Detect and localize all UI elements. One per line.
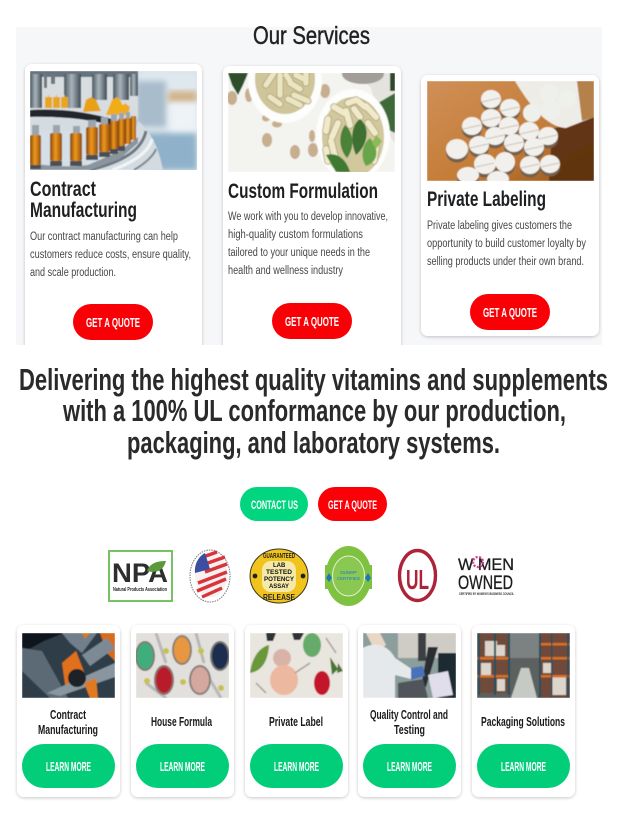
- label: Packaging Solutions: [481, 714, 565, 729]
- headline: packaging, and laboratory systems.: [127, 425, 500, 460]
- logo: guaranteed lab tested: LAB: [273, 563, 286, 569]
- logo: natural products association: NPA: [112, 558, 168, 588]
- logo: ul: [400, 550, 436, 600]
- logo: gmp certified: GMP: [340, 570, 357, 575]
- card: packaging solutions: [472, 625, 575, 797]
- card description: selling products under their own brand.: [427, 256, 584, 268]
- image: colourful supplements: [136, 633, 229, 698]
- card: quality control and testing: [358, 625, 461, 797]
- logo: ul: UL: [406, 564, 429, 595]
- label: Contract: [50, 707, 86, 722]
- image: machinery: [22, 633, 115, 698]
- label: [38, 707, 98, 737]
- card description: [228, 211, 388, 277]
- button: contact us: CONTACT US: [251, 500, 298, 512]
- button: get a quote: [73, 304, 153, 340]
- logo: guaranteed lab tested: POTENCY: [264, 576, 295, 583]
- button: learn more: LEARN MORE: [501, 759, 546, 774]
- button: learn more: LEARN MORE: [160, 759, 205, 774]
- label: Manufacturing: [38, 722, 98, 737]
- label: House Formula: [151, 714, 212, 729]
- button: get a quote: GET A QUOTE: [328, 500, 377, 512]
- logo: guaranteed lab tested: ASSAY: [269, 583, 290, 590]
- card description: opportunity to build customer loyalty by: [427, 238, 586, 250]
- image: white tablets: [427, 81, 594, 181]
- panel: our services: [16, 22, 602, 357]
- image: lab technician: [363, 633, 456, 698]
- button: learn more: LEARN MORE: [46, 759, 91, 774]
- button: learn more: [22, 744, 115, 788]
- image: bottling line: [30, 71, 197, 170]
- card: private labeling: [421, 75, 599, 336]
- headline: [19, 362, 608, 460]
- logo: gmp certified: CERTIFIED: [337, 576, 361, 581]
- image: warehouse: [477, 633, 570, 698]
- logo: guaranteed lab tested: [250, 549, 308, 603]
- label: Quality Control and: [370, 707, 448, 722]
- card description: Private labeling gives customers the: [427, 220, 572, 232]
- button: get a quote: GET A QUOTE: [483, 306, 537, 320]
- logo: women owned: W MEN: [458, 555, 514, 574]
- logo: guaranteed lab tested: RELEASE: [263, 593, 296, 602]
- logo: women owned: [458, 555, 515, 596]
- logo: gmp certified: [325, 546, 372, 606]
- card title: Custom Formulation: [228, 180, 378, 203]
- card title: Contract: [30, 178, 96, 201]
- image: herbs and pills: [250, 633, 343, 698]
- logo: guaranteed lab tested: TESTED: [266, 569, 292, 576]
- card description: [427, 220, 586, 268]
- card title: [30, 182, 136, 222]
- button: learn more: [250, 744, 343, 788]
- card title: Manufacturing: [30, 199, 137, 222]
- card description: health and wellness industry: [228, 265, 343, 277]
- card: contract manufacturing: [25, 64, 202, 355]
- card description: [30, 231, 191, 279]
- label: Testing: [394, 722, 425, 737]
- button: get a quote: [272, 303, 352, 339]
- card description: Our contract manufacturing can help: [30, 231, 178, 243]
- card: house formula: [131, 625, 234, 797]
- card: contract manufacturing service: [17, 625, 120, 797]
- card: private label: [245, 625, 348, 797]
- card: custom formulation: [222, 66, 402, 345]
- card description: tailored to your unique needs in the: [228, 247, 370, 259]
- card description: high-quality custom formulations: [228, 229, 363, 241]
- card description: customers reduce costs, ensure quality,: [30, 249, 191, 261]
- button: learn more: LEARN MORE: [274, 759, 319, 774]
- logo row: [109, 546, 515, 606]
- card title: Private Labeling: [427, 188, 546, 211]
- button: learn more: [363, 744, 456, 788]
- button: get a quote: GET A QUOTE: [285, 315, 339, 329]
- button: contact us: [240, 487, 308, 521]
- logo: natural products association: [109, 551, 172, 601]
- button: get a quote: GET A QUOTE: [86, 316, 140, 330]
- card description: We work with you to develop innovative,: [228, 211, 388, 223]
- logo: guaranteed lab tested: GUARANTEED: [263, 553, 295, 560]
- image: capsule bowls: [228, 73, 395, 172]
- button: learn more: [136, 744, 229, 788]
- card description: and scale production.: [30, 267, 116, 279]
- logo: women owned: CERTIFIED BY WOMEN'S BUSINESS COUNCIL: [459, 592, 515, 596]
- label: [370, 707, 448, 737]
- button: get a quote: [470, 294, 550, 330]
- button: learn more: LEARN MORE: [387, 759, 432, 774]
- button: get a quote: [318, 487, 387, 521]
- label: Private Label: [269, 714, 323, 729]
- logo: american flag seal: [190, 550, 230, 602]
- heading: our services: Our Services: [253, 22, 370, 50]
- logo: women owned: OWNED: [458, 573, 513, 594]
- button: learn more: [477, 744, 570, 788]
- logo: natural products association: Natural Products Association: [113, 587, 167, 593]
